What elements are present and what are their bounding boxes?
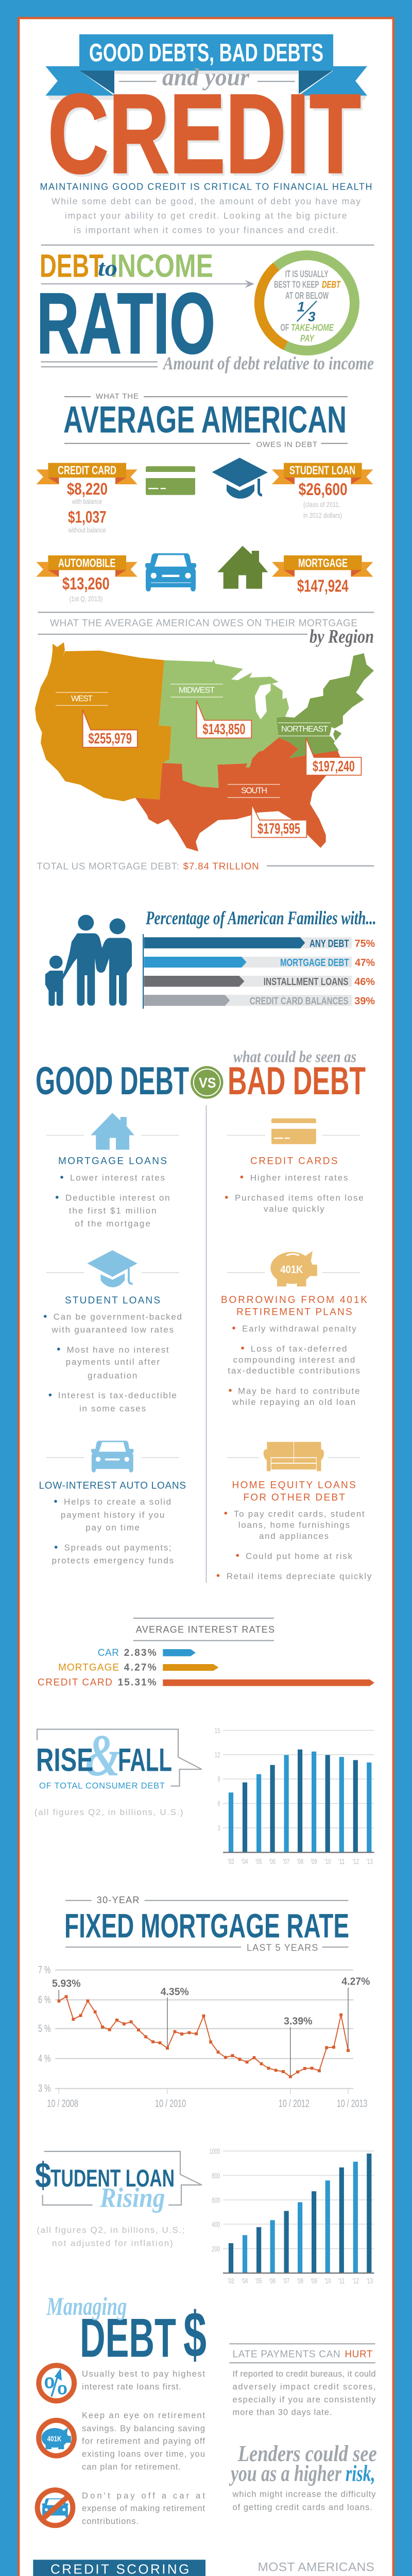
tip: car payoff: Don't pay off a car at	[82, 2491, 205, 2500]
heading: debt to income: to	[98, 256, 117, 281]
bar chart: student loan debt: 800	[212, 2172, 220, 2180]
ribbon: automobile	[36, 555, 138, 603]
icon: sofa	[264, 1442, 324, 1471]
bar chart: families with debt	[143, 934, 375, 1009]
panel: credit cards: CREDIT CARDS	[250, 1156, 338, 1167]
title block	[40, 35, 372, 235]
panel: borrowing from 401k: while repaying an old loan	[232, 1397, 355, 1407]
bar chart: consumer debt: 15	[215, 1726, 220, 1735]
panel: borrowing from 401k: BORROWING FROM 401K	[221, 1295, 367, 1306]
rate bar: credit card	[38, 1677, 374, 1688]
bar: any debt: ANY DEBT	[310, 938, 349, 950]
ribbon: credit card: $1,037	[68, 507, 107, 526]
bar chart: consumer debt: 3	[217, 1824, 220, 1833]
tip: retirement savings: existing loans over time, you	[82, 2449, 205, 2459]
icon: car	[145, 553, 196, 591]
callout: lenders higher risk: of getting credit cards and loans.	[233, 2503, 372, 2512]
section: average interest rates	[38, 1618, 374, 1688]
bar chart: student loan debt: '05	[255, 2277, 262, 2285]
icon: house	[217, 546, 268, 589]
and your: and your	[162, 64, 250, 91]
bar chart: student loan debt: '07	[283, 2277, 289, 2285]
callout: west value: $255,979	[88, 731, 132, 747]
tip: car payoff: expense of making retirement	[82, 2504, 205, 2513]
bar chart: consumer debt: '06	[269, 1857, 276, 1866]
ribbon: student loan: in 2012 dollars)	[303, 511, 342, 519]
underline strokes	[41, 362, 158, 367]
heading: student loan rising: TUDENT LOAN	[50, 2164, 175, 2192]
heading: good debt vs bad debt: what could be seen as	[233, 1047, 356, 1066]
callout: midwest value: $143,850	[202, 721, 245, 738]
bar chart: student loan debt: '12	[352, 2277, 359, 2285]
icon: piggy bank: 401K	[280, 1264, 303, 1276]
panel: late payments: adversely impact credit scores,	[233, 2382, 376, 2392]
bar chart: student loan debt: '06	[269, 2277, 276, 2285]
ribbon: student loan: $26,600	[299, 480, 348, 499]
icon: family	[45, 915, 132, 1006]
bar: mortgage debt: 47%	[355, 957, 375, 969]
panel: credit cards	[225, 1118, 364, 1214]
callout: northeast value: $197,240	[313, 758, 355, 775]
section: mortgage by region	[35, 618, 374, 871]
bar chart: student loan debt	[210, 2147, 374, 2285]
bar chart: consumer debt: '07	[283, 1857, 289, 1866]
heading: fixed mortgage rate: LAST 5 YEARS	[247, 1942, 318, 1953]
heading: rise and fall: RISE	[36, 1742, 93, 1778]
icon: percent with arrow	[39, 2365, 74, 2401]
heading: average american: WHAT THE	[96, 392, 139, 401]
heading: managing debts: DEBT	[80, 2307, 176, 2369]
heading: mortgage by region: by Region	[310, 626, 374, 648]
bar: any debt: 75%	[355, 938, 375, 950]
bar chart: consumer debt: '03	[228, 1857, 234, 1866]
panel: credit cards: Purchased items often lose	[235, 1193, 364, 1202]
panel: home equity loans: loans, home furnishings	[238, 1520, 350, 1530]
callout: midwest value	[197, 701, 251, 738]
line chart: mortgage rate: 5 %	[38, 2023, 51, 2035]
donut callout: one third: OF	[280, 323, 289, 333]
title ribbon	[45, 35, 367, 100]
panel: credit cards: Higher interest rates	[250, 1173, 348, 1182]
region label: midwest: MIDWEST	[179, 686, 215, 695]
tip: retirement savings: can plan for retirement.	[82, 2463, 181, 2472]
panel: late payments: more than 30 days late.	[233, 2408, 332, 2417]
bar chart: consumer debt: '09	[311, 1857, 317, 1866]
heading: student loan rising: Rising	[99, 2182, 165, 2213]
tip: retirement savings: Keep an eye on retirement	[82, 2411, 205, 2420]
rate bar: credit card: CREDIT CARD	[38, 1677, 112, 1688]
rate bar: car: CAR	[98, 1648, 119, 1658]
panel: student loans	[44, 1250, 182, 1414]
bar: credit card balances	[144, 995, 375, 1007]
heading: good debt vs bad debt: GOOD DEBT	[36, 1059, 189, 1103]
map: chesapeake bay	[330, 727, 336, 743]
intro paragraph: is important when it comes to your finances and credit.	[74, 225, 338, 235]
line chart: mortgage rate: 5.93%	[52, 1978, 81, 1989]
icon: credit card	[271, 1118, 316, 1144]
bar chart: student loan debt: 1000	[210, 2147, 220, 2156]
bar chart: student loan debt: '13	[366, 2277, 373, 2285]
bar chart: consumer debt: 12	[215, 1751, 220, 1759]
callout: west value	[83, 710, 138, 747]
note: not adjusted for inflation)	[52, 2238, 173, 2248]
panel: home equity loans: Could put home at risk	[246, 1551, 352, 1561]
region label: west	[56, 692, 108, 705]
line chart: mortgage rate: 7 %	[38, 1964, 51, 1976]
total mortgage debt: TOTAL US MORTGAGE DEBT:	[37, 860, 179, 871]
bar chart: consumer debt: '11	[338, 1857, 345, 1866]
map: south region	[135, 738, 340, 851]
tip: pay highest interest first: interest rate loans first.	[82, 2382, 181, 2392]
icon: graduation cap	[87, 1250, 138, 1287]
panel: borrowing from 401k: May be hard to contribute	[238, 1386, 359, 1396]
donut callout: one third	[259, 256, 354, 350]
callout: lenders higher risk: you as a higher	[229, 2461, 342, 2486]
bar chart: student loan debt: 600	[212, 2196, 220, 2205]
ribbon: automobile: $13,260	[62, 574, 110, 593]
tip: pay highest interest first: Usually best to pay highest	[82, 2369, 205, 2379]
line chart: mortgage rate: 3.39%	[284, 2016, 313, 2027]
icon: house	[91, 1113, 134, 1150]
panel: home equity loans: and appliances	[259, 1531, 329, 1541]
section: credit scoring	[33, 2560, 376, 2576]
heading: average interest rates: AVERAGE INTEREST RATES	[136, 1624, 274, 1635]
heading: student loan rising	[35, 2155, 175, 2213]
heading: managing debts: Managing	[46, 2292, 127, 2320]
panel: borrowing from 401k	[221, 1251, 367, 1407]
callout: south value	[251, 804, 306, 838]
panel: borrowing from 401k: Early withdrawal penalty	[242, 1324, 356, 1333]
bar chart: consumer debt: '05	[255, 1857, 262, 1866]
callout bracket	[43, 2151, 202, 2205]
donut callout: one third: DEBT	[322, 280, 341, 290]
section: managing debts	[38, 2292, 377, 2526]
heading: average american	[63, 392, 348, 449]
bar: installment loans: INSTALLMENT LOANS	[264, 976, 348, 988]
region label: south: SOUTH	[241, 786, 267, 795]
panel: low-interest auto loans: Spreads out payments;	[64, 1543, 171, 1553]
tip: pay highest interest first	[39, 2365, 205, 2401]
heading: good debt vs bad debt: VS	[199, 1075, 216, 1091]
panel: late payments: HURT	[345, 2349, 373, 2360]
callout: lenders higher risk: which might increase the difficulty	[232, 2490, 376, 2499]
ribbon: credit card: $8,220	[67, 480, 108, 498]
icon: percent with arrow: 0	[57, 2382, 67, 2397]
tip: car payoff: contributions.	[82, 2517, 139, 2526]
panel: low-interest auto loans: payment history if you	[61, 1510, 164, 1520]
ribbon: mortgage	[272, 555, 373, 596]
panel: borrowing from 401k: tax-deductible contributions	[228, 1366, 360, 1376]
section: debt to income ratio	[37, 248, 374, 374]
title ribbon: GOOD DEBTS, BAD DEBTS	[89, 39, 323, 67]
line chart: mortgage rate: 10 / 2012	[279, 2098, 310, 2110]
subheading: OF TOTAL CONSUMER DEBT	[39, 1781, 165, 1790]
panel: late payments: LATE PAYMENTS CAN	[233, 2349, 340, 2360]
heading: fixed mortgage rate	[64, 1895, 349, 1953]
bar chart: student loan debt: 200	[212, 2245, 220, 2253]
donut callout: one third: PAY	[300, 333, 315, 344]
panel: student loans: Most have no interest	[67, 1345, 169, 1354]
heading: debt to income: INCOME	[110, 248, 213, 284]
tip: retirement savings	[39, 2411, 205, 2472]
icon: no car	[38, 2490, 73, 2526]
bar: installment loans: 46%	[354, 976, 375, 988]
callout: northeast value	[306, 738, 362, 775]
bar chart: consumer debt: '04	[242, 1857, 248, 1866]
panel: mortgage loans: the first $1 million	[69, 1206, 157, 1216]
donut callout: one third: BEST TO KEEP	[274, 280, 319, 290]
intro paragraph: While some debt can be good, the amount of debt you have may	[52, 196, 360, 206]
section: average american debts	[36, 392, 373, 603]
bar chart: consumer debt	[215, 1726, 374, 1866]
ribbon: automobile: AUTOMOBILE	[58, 556, 115, 570]
icon: percent with arrow: 0	[44, 2374, 55, 2392]
callout bracket	[37, 1729, 202, 1786]
RATIO headline: RATIO	[37, 275, 215, 372]
panel: student loans: Interest is tax-deductible	[58, 1391, 177, 1400]
rate bar: car: 2.83%	[124, 1648, 157, 1658]
panel: student loans: graduation	[88, 1370, 137, 1380]
bar chart: consumer debt: 6	[217, 1799, 220, 1808]
bar chart: student loan debt: '03	[228, 2277, 234, 2285]
heading: fixed mortgage rate: 30-YEAR	[97, 1895, 139, 1905]
region label: northeast: NORTHEAST	[281, 725, 328, 734]
donut callout: one third: TAKE-HOME	[291, 323, 334, 333]
rate bar: mortgage: MORTGAGE	[58, 1662, 119, 1673]
tip: car payoff	[38, 2490, 205, 2526]
panel: home equity loans: Retail items depreciate quickly	[227, 1571, 372, 1581]
line chart: mortgage rate: 4.35%	[161, 1987, 189, 1998]
icon: car	[91, 1440, 134, 1472]
panel: home equity loans: To pay credit cards, student	[234, 1509, 365, 1519]
panel: low-interest auto loans: Helps to create a solid	[64, 1497, 171, 1506]
icon: piggy bank: 401K	[47, 2435, 62, 2444]
bar: credit card balances: CREDIT CARD BALANCES	[250, 995, 348, 1007]
note: (all figures Q2, in billions, U.S.;	[37, 2225, 185, 2235]
map: lake michigan	[255, 684, 271, 719]
bar: mortgage debt	[144, 957, 375, 969]
panel: late payments: especially if you are consistently	[233, 2395, 376, 2404]
region label: south	[228, 784, 280, 798]
panel: borrowing from 401k: compounding interest and	[233, 1355, 355, 1365]
panel: low-interest auto loans: LOW-INTEREST AUTO LOANS	[39, 1480, 186, 1491]
panel: mortgage loans: of the mortgage	[75, 1218, 150, 1228]
rate bar: credit card: 15.31%	[118, 1677, 157, 1688]
bar chart: consumer debt: '10	[324, 1857, 331, 1866]
ribbon: mortgage: MORTGAGE	[298, 556, 348, 570]
callout: lenders higher risk: risk,	[346, 2461, 375, 2486]
bar: any debt	[144, 937, 375, 950]
tip: retirement savings: for retirement and paying off	[82, 2437, 205, 2446]
bar chart: consumer debt: '13	[366, 1857, 373, 1866]
panel: borrowing from 401k: Loss of tax-deferred	[251, 1344, 347, 1354]
line chart: mortgage rate: 4.27%	[341, 1976, 370, 1987]
heading: managing debts: $	[183, 2299, 207, 2371]
panel: student loans: STUDENT LOANS	[65, 1295, 160, 1306]
heading: rise and fall: &	[85, 1723, 121, 1788]
line chart: mortgage rate: 3 %	[38, 2083, 51, 2094]
callout: lenders higher risk	[229, 2441, 377, 2512]
bar chart: student loan debt: '10	[324, 2277, 331, 2285]
donut callout: one third: 3	[308, 309, 316, 325]
rate bar: mortgage	[58, 1662, 218, 1673]
line chart: mortgage rate: 6 %	[38, 1994, 51, 2006]
panel: late payments	[229, 2344, 376, 2417]
ribbon: automobile: (1st Q, 2013)	[70, 595, 102, 603]
arrow	[41, 280, 254, 288]
section: percentage of american families	[45, 908, 376, 1009]
section: fixed mortgage rate	[38, 1895, 370, 2110]
intro paragraph: impact your ability to get credit. Looking at the big picture	[65, 211, 347, 221]
panel: home equity loans: FOR OTHER DEBT	[243, 1493, 345, 1503]
heading: managing debts	[46, 2292, 207, 2371]
bar chart: consumer debt: '08	[297, 1857, 303, 1866]
icon: piggy bank	[39, 2420, 74, 2456]
note	[37, 2225, 185, 2248]
panel: low-interest auto loans: protects emergency funds	[52, 1556, 174, 1566]
line chart: mortgage rate: 10 / 2008	[47, 2098, 78, 2110]
line chart: mortgage rate: 4 %	[38, 2053, 51, 2064]
total mortgage debt: $7.84 TRILLION	[183, 860, 259, 871]
ribbon: student loan: (class of 2011,	[303, 500, 340, 509]
tip: retirement savings: savings. By balancing saving	[82, 2424, 205, 2433]
panel: mortgage loans: Deductible interest on	[65, 1193, 170, 1202]
panel: home equity loans: HOME EQUITY LOANS	[232, 1480, 356, 1490]
icon: graduation cap	[212, 457, 268, 499]
heading: average american: OWES IN DEBT	[256, 440, 317, 449]
note: (all figures Q2, in billions, U.S.)	[35, 1807, 183, 1817]
line chart: mortgage rate	[38, 1964, 370, 2110]
panel: student loans: Can be government-backed	[54, 1312, 182, 1322]
bar chart: consumer debt: '12	[352, 1857, 359, 1866]
bar chart: student loan debt: 400	[212, 2221, 220, 2229]
panel: student loans: with guaranteed low rates	[52, 1325, 174, 1334]
heading: rise and fall	[36, 1723, 172, 1788]
donut callout: one third: IT IS USUALLY	[285, 269, 329, 279]
ribbon: credit card: without balance	[68, 526, 106, 534]
map: midwest region	[159, 659, 289, 788]
panel: credit cards: value quickly	[264, 1204, 324, 1214]
subtitle: MAINTAINING GOOD CREDIT IS CRITICAL TO FINANCIAL HEALTH	[40, 181, 372, 192]
rate bar: car	[98, 1648, 196, 1658]
donut callout: one third: AT OR BELOW	[285, 291, 329, 301]
panel: home equity loans	[217, 1442, 372, 1581]
panel: student loans: payments until after	[66, 1357, 160, 1367]
intro paragraph	[52, 196, 360, 235]
bar chart: consumer debt: 9	[217, 1775, 220, 1784]
panel: mortgage loans: Lower interest rates	[70, 1173, 165, 1182]
ribbon: credit card: CREDIT CARD	[58, 464, 116, 477]
panel: student loans: in some cases	[79, 1404, 146, 1414]
map: northeast region	[277, 653, 374, 758]
map: west region	[35, 642, 171, 801]
panel: borrowing from 401k: RETIREMENT PLANS	[236, 1307, 352, 1318]
bar: mortgage debt: MORTGAGE DEBT	[280, 957, 349, 969]
heading: rise and fall: FALL	[118, 1742, 172, 1778]
bar: credit card balances: 39%	[354, 995, 375, 1007]
ribbon: student loan	[272, 463, 373, 519]
bar chart: student loan debt: '09	[311, 2277, 317, 2285]
bar chart: student loan debt: '08	[297, 2277, 303, 2285]
region label: west: WEST	[71, 694, 93, 703]
region label: northeast	[278, 723, 331, 736]
panel: mortgage loans: MORTGAGE LOANS	[58, 1156, 167, 1167]
icon: piggy bank	[270, 1251, 317, 1286]
bar chart: student loan debt: '04	[242, 2277, 248, 2285]
section: student loan rising	[35, 2147, 374, 2285]
ribbon: student loan: STUDENT LOAN	[289, 464, 355, 477]
total mortgage debt	[37, 860, 374, 871]
panel: low-interest auto loans	[39, 1440, 186, 1566]
donut callout: one third: 1	[297, 299, 305, 314]
callout: lenders higher risk: Lenders could see	[237, 2441, 377, 2466]
ribbon: credit card	[36, 463, 138, 534]
heading: debt to income: DEBT	[40, 248, 104, 284]
section: good debt vs bad debt	[36, 1047, 372, 1583]
heading: student loan rising: $	[35, 2155, 51, 2195]
heading: mortgage by region	[38, 618, 374, 648]
panel: late payments: If reported to credit bureaus, it could	[233, 2369, 376, 2379]
heading: debt to income	[40, 248, 213, 284]
line chart: mortgage rate: 10 / 2010	[155, 2098, 186, 2110]
panel: low-interest auto loans: pay on time	[85, 1523, 140, 1532]
ribbon: credit card: with balance	[72, 497, 102, 505]
line chart: mortgage rate: 10 / 2013	[337, 2098, 367, 2110]
bar chart: student loan debt: '11	[338, 2277, 345, 2285]
heading: mortgage by region: WHAT THE AVERAGE AMERICAN OWES ON THEIR MORTGAGE	[50, 618, 357, 629]
callout: south value: $179,595	[258, 821, 300, 837]
panel: mortgage loans	[46, 1113, 179, 1228]
icon: credit card	[146, 466, 195, 495]
bar: installment loans	[144, 976, 375, 988]
region label: midwest	[170, 684, 223, 697]
ribbon: mortgage: $147,924	[297, 577, 349, 596]
section: rise and fall	[35, 1723, 374, 1866]
heading: good debt vs bad debt	[36, 1047, 366, 1103]
rate bar: mortgage: 4.27%	[124, 1662, 157, 1673]
heading: score range: MOST AMERICANS	[258, 2560, 374, 2574]
